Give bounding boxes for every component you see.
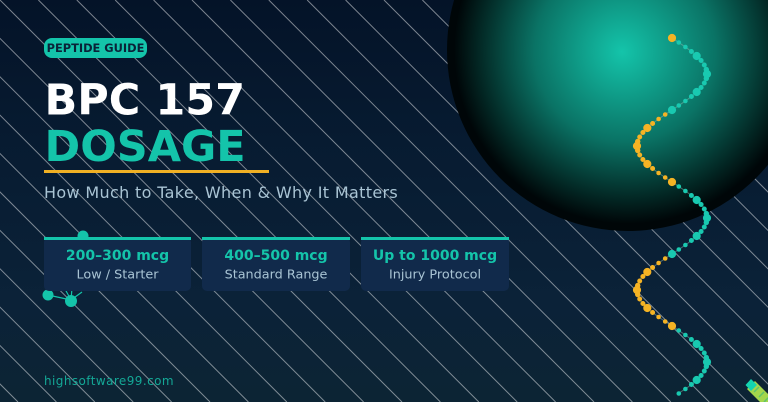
card: low starter dose <box>44 237 191 291</box>
badge: peptide guide <box>44 38 147 58</box>
peptide helix chain <box>633 34 711 396</box>
footer website: highsoftware99.com <box>44 374 174 388</box>
molecule icon <box>42 230 88 307</box>
card: injury protocol dose: Up to 1000 mcg <box>373 248 497 264</box>
card: injury protocol dose <box>361 237 509 291</box>
card: injury protocol dose: Injury Protocol <box>389 268 481 282</box>
card: low starter dose: Low / Starter <box>76 268 159 282</box>
card: low starter dose: 200–300 mcg <box>66 248 169 264</box>
card: standard range dose <box>202 237 350 291</box>
corner logo <box>746 379 768 402</box>
title: DOSAGE: DOSAGE <box>44 122 246 172</box>
glowing teal sphere <box>447 0 768 231</box>
title: BPC 157: BPC 157 <box>44 76 245 126</box>
card: standard range dose: 400–500 mcg <box>224 248 328 264</box>
card: standard range dose: Standard Range <box>225 268 328 282</box>
badge: peptide guide: PEPTIDE GUIDE <box>47 41 144 55</box>
gold underline <box>44 170 269 173</box>
subtitle: How Much to Take, When & Why It Matters <box>44 183 398 202</box>
